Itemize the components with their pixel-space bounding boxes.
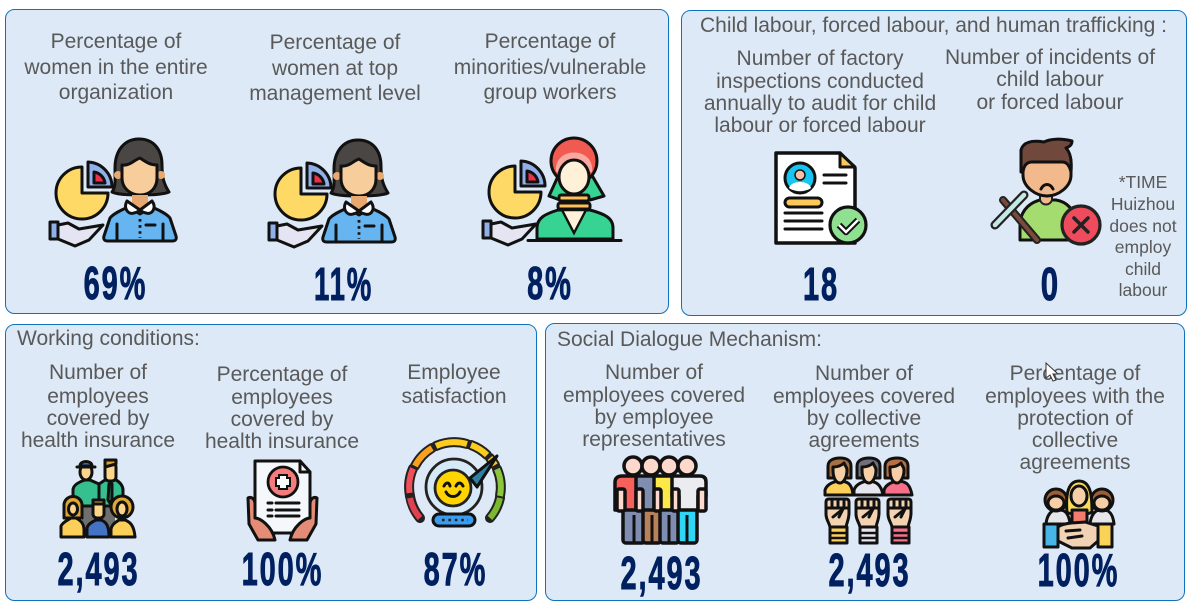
label: employee representatives: representatives bbox=[582, 428, 726, 451]
label: employees with insurance: health insurance bbox=[21, 429, 175, 452]
icon: handshake team bbox=[1044, 481, 1114, 548]
note: TIME Huizhou: child bbox=[1125, 259, 1161, 279]
label: women in organization: organization bbox=[59, 81, 173, 104]
icon: insurance document in hands bbox=[248, 461, 317, 540]
label: employee satisfaction: Employee bbox=[407, 361, 501, 384]
icon: row of employee representatives bbox=[615, 457, 706, 543]
label: protection of agreements: employees with the bbox=[985, 385, 1165, 408]
label: employees with insurance: Number of bbox=[49, 361, 147, 384]
value: 2,493 agreements: 2,493 bbox=[829, 545, 910, 597]
label: factory inspections: inspections conducted bbox=[716, 70, 924, 93]
value: 2,493 employees: 2,493 bbox=[58, 544, 139, 596]
value: 100% protected: 100% bbox=[1038, 545, 1119, 597]
note: TIME Huizhou: employ bbox=[1115, 237, 1171, 257]
panel: workforce diversity bbox=[6, 10, 668, 314]
value: 100% insured: 100% bbox=[242, 544, 323, 596]
label: women in organization: Percentage of bbox=[51, 30, 182, 53]
note: TIME Huizhou: *TIME bbox=[1119, 172, 1167, 192]
label: percentage with insurance: Percentage of bbox=[217, 363, 348, 386]
note: TIME Huizhou: Huizhou bbox=[1111, 194, 1175, 214]
icon: sad child with pickaxe bbox=[995, 139, 1100, 244]
label: collective agreements: employees covered bbox=[773, 385, 955, 408]
label: factory inspections: labour or forced labour bbox=[714, 114, 926, 137]
label: protection of agreements: Percentage of bbox=[1010, 362, 1141, 385]
heading: social dialogue: Social Dialogue Mechanism: bbox=[557, 328, 822, 351]
icon: mouse cursor bbox=[1046, 363, 1058, 381]
label: minorities: Percentage of bbox=[485, 30, 616, 53]
label: women at top management: Percentage of bbox=[270, 31, 401, 54]
label: factory inspections: annually to audit for child bbox=[704, 92, 936, 115]
label: employee representatives: Number of bbox=[605, 361, 703, 384]
label: protection of agreements: agreements bbox=[1020, 451, 1130, 474]
icon: group of employees bbox=[61, 460, 135, 537]
icon: minority worker with pie chart bbox=[483, 138, 621, 245]
label: incidents: child labour bbox=[996, 68, 1104, 91]
icon: woman with pie chart bbox=[50, 139, 176, 246]
label: minorities: minorities/vulnerable bbox=[454, 56, 646, 79]
icon: satisfaction gauge bbox=[409, 442, 501, 526]
value: 69%: 69% bbox=[84, 258, 147, 310]
note: TIME Huizhou: labour bbox=[1119, 280, 1167, 300]
label: collective agreements: Number of bbox=[815, 362, 913, 385]
label: women in organization: women in the entire bbox=[23, 56, 208, 79]
heading: working conditions: Working conditions: bbox=[17, 327, 200, 350]
label: factory inspections: Number of factory bbox=[737, 47, 904, 70]
value: 18: 18 bbox=[803, 259, 839, 311]
label: collective agreements: agreements bbox=[809, 429, 919, 452]
value: 0: 0 bbox=[1041, 259, 1060, 311]
label: protection of agreements: protection of bbox=[1017, 407, 1133, 430]
label: employee representatives: by employee bbox=[594, 406, 714, 429]
value: 8%: 8% bbox=[527, 258, 573, 310]
note: TIME Huizhou: does not bbox=[1109, 216, 1177, 236]
icon: inspection document bbox=[776, 153, 866, 243]
icon: manager woman with pie chart bbox=[269, 140, 395, 247]
value: 2,493 representatives: 2,493 bbox=[621, 548, 702, 600]
value: 87% satisfaction: 87% bbox=[424, 544, 487, 596]
label: employees with insurance: employees bbox=[47, 385, 149, 408]
icon: raised fists bbox=[825, 458, 912, 543]
label: employee representatives: employees covered bbox=[563, 384, 745, 407]
panel: social dialogue bbox=[546, 324, 1184, 600]
label: percentage with insurance: health insurance bbox=[205, 430, 359, 453]
label: protection of agreements: collective bbox=[1032, 429, 1118, 452]
label: incidents: Number of incidents of bbox=[945, 46, 1155, 69]
label: percentage with insurance: employees bbox=[231, 386, 333, 409]
label: incidents: or forced labour bbox=[976, 91, 1124, 114]
panel: child labour bbox=[682, 10, 1186, 316]
label: women at top management: women at top bbox=[271, 57, 398, 80]
label: collective agreements: by collective bbox=[807, 407, 921, 430]
panel: working conditions bbox=[6, 324, 536, 600]
label: employee satisfaction: satisfaction bbox=[401, 385, 507, 408]
heading: child labour: Child labour, forced labour, and human trafficking : bbox=[700, 14, 1167, 37]
label: minorities: group workers bbox=[483, 81, 617, 104]
value: 11%: 11% bbox=[314, 260, 373, 311]
label: women at top management: management level bbox=[249, 82, 421, 105]
label: employees with insurance: covered by bbox=[47, 407, 150, 430]
label: percentage with insurance: covered by bbox=[231, 408, 334, 431]
